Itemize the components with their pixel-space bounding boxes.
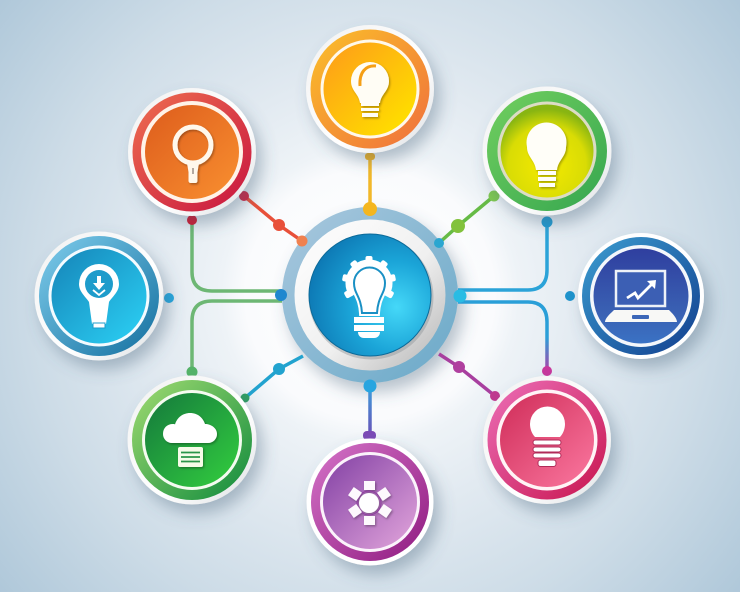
icon: hollow bulb: [175, 127, 211, 183]
node: upper-right green bulb: [482, 86, 612, 216]
connector: left green to red node: [187, 215, 282, 291]
icon: screw bulb: [530, 406, 565, 466]
connector: upper-right green: [434, 190, 500, 248]
connector: right blue to green node: [458, 216, 552, 290]
connector: left hub port: [275, 289, 287, 301]
connector: upper-left red: [239, 191, 308, 246]
connector: lower-right purple: [439, 354, 500, 401]
icon: cloud with document: [163, 413, 217, 467]
node: lower-right pink bulb: [483, 376, 611, 504]
icon: download pin bulb: [79, 264, 119, 328]
icon: bulb with highlight: [351, 62, 389, 117]
connector: bottom blue-purple: [363, 380, 376, 440]
icon: gear lightbulb: [342, 256, 396, 338]
central hub: [282, 207, 458, 383]
connector: top yellow: [363, 153, 377, 216]
node: left blue download: [34, 232, 164, 360]
node: top yellow bulb: [306, 25, 434, 153]
connector: right blue-violet to pink node: [458, 302, 552, 376]
node: bottom purple gear: [306, 438, 434, 566]
connector: laptop stub: [565, 291, 575, 301]
connector: right hub port: [454, 290, 466, 302]
connector: lower-left blue: [240, 356, 303, 402]
icon: gear of petals: [348, 481, 392, 525]
node: lower-left green cloud: [128, 376, 256, 504]
node: right laptop: [578, 233, 704, 359]
icon: laptop with rising chart: [605, 271, 677, 322]
icon: solid bulb: [526, 123, 566, 187]
connector: left blue stub: [164, 293, 174, 303]
connector: left green to cloud node: [186, 301, 282, 378]
node: upper-left red magnifier: [128, 88, 256, 216]
